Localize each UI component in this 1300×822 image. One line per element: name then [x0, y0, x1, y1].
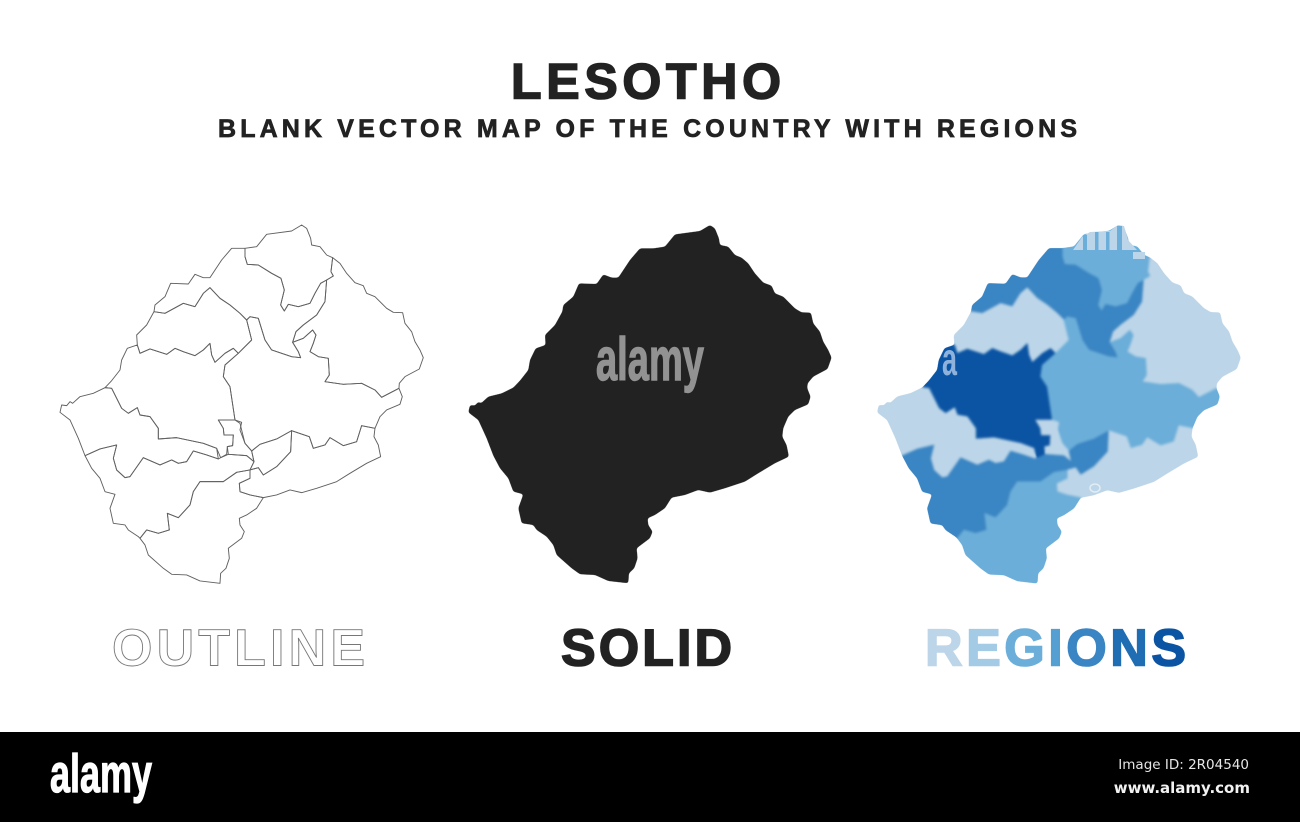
label: solid: SOLID: [561, 620, 732, 678]
footer bar: [0, 732, 1300, 822]
title: LESOTHO: [511, 54, 781, 110]
watermark swirl on regions map: [1090, 484, 1100, 492]
region: north-west: [954, 288, 1069, 362]
outline map: [60, 225, 423, 583]
region: central highlands: [1041, 317, 1220, 451]
region: south-east: [1057, 426, 1198, 498]
subtitle: BLANK VECTOR MAP OF THE COUNTRY WITH REGIONS: [218, 115, 1077, 143]
regions map: [877, 225, 1241, 583]
solid map: [468, 225, 832, 583]
region: east: [1110, 258, 1241, 397]
region: narrow strip: [1067, 431, 1109, 475]
watermark on solid map: alamy: [596, 326, 704, 393]
label: outline: OUTLINE: [112, 620, 365, 678]
watermark letter on regions map: a: [942, 333, 957, 385]
footer url: www.alamy.com: [1114, 779, 1250, 797]
watermark stripes at top of regions map: [1073, 225, 1145, 259]
region: north: [1062, 225, 1151, 311]
region: south: [957, 470, 1081, 583]
region: capital district: [922, 343, 1056, 458]
region: small central: [1036, 420, 1071, 462]
footer image id: Image ID: 2R04540: [1118, 757, 1249, 773]
label: regions: REGIONS: [925, 620, 1186, 678]
footer logo: alamy: [50, 744, 152, 804]
region: south-west lower: [902, 445, 1071, 538]
region: north-central: [971, 248, 1144, 358]
region: south-west: [877, 388, 1036, 478]
